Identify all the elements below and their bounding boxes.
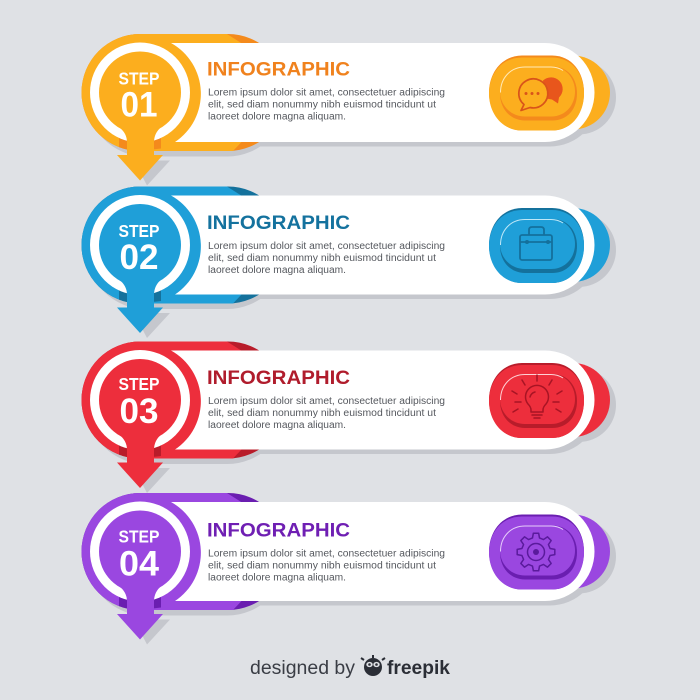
body text: elit, sed diam nonummy nibh euismod tincidunt ut xyxy=(208,253,436,264)
step badge: 01 xyxy=(120,86,158,124)
heading: INFOGRAPHIC xyxy=(207,58,350,80)
body text: elit, sed diam nonummy nibh euismod tincidunt ut xyxy=(208,100,436,110)
heading: INFOGRAPHIC xyxy=(207,367,350,389)
step badge: STEP xyxy=(118,221,160,241)
icon button: light bulb xyxy=(489,363,584,438)
icon: freepik logo xyxy=(361,655,385,676)
body text xyxy=(208,241,445,276)
heading: INFOGRAPHIC xyxy=(207,520,350,542)
panel: step 2 xyxy=(82,186,616,338)
panel: step 3 xyxy=(82,342,616,493)
body text: Lorem ipsum dolor sit amet, consectetuer adipiscing xyxy=(208,241,445,252)
panel: step 4 xyxy=(82,493,616,644)
step badge xyxy=(99,510,181,640)
body text xyxy=(208,548,445,584)
body text: elit, sed diam nonummy nibh euismod tincidunt ut xyxy=(208,408,436,419)
icon button: chat bubbles xyxy=(489,56,584,130)
body text: laoreet dolore magna aliquam. xyxy=(208,265,346,276)
icon button: briefcase xyxy=(489,208,584,283)
body text: elit, sed diam nonummy nibh euismod tincidunt ut xyxy=(208,560,436,572)
step badge: STEP xyxy=(118,526,160,546)
body text: Lorem ipsum dolor sit amet, consectetuer adipiscing xyxy=(208,88,445,98)
step badge: 02 xyxy=(120,238,158,277)
body text: laoreet dolore magna aliquam. xyxy=(208,572,346,584)
white card xyxy=(171,350,594,450)
footer credit xyxy=(250,655,450,679)
step badge: STEP xyxy=(118,374,160,394)
panel: step 1 xyxy=(82,34,616,186)
body text: Lorem ipsum dolor sit amet, consectetuer adipiscing xyxy=(208,548,445,560)
body text: Lorem ipsum dolor sit amet, consectetuer adipiscing xyxy=(208,396,445,407)
body text: laoreet dolore magna aliquam. xyxy=(208,112,346,122)
white card xyxy=(171,196,594,294)
body text xyxy=(208,396,445,431)
step badge: 04 xyxy=(119,544,160,584)
heading: INFOGRAPHIC xyxy=(207,212,350,234)
step badge xyxy=(99,359,181,488)
icon button: gear xyxy=(489,514,584,590)
step badge: STEP xyxy=(118,68,160,88)
white card xyxy=(171,43,594,142)
step badge xyxy=(99,52,181,180)
footer credit: freepik xyxy=(387,657,450,679)
step badge: 03 xyxy=(120,392,158,431)
body text xyxy=(208,88,445,122)
step badge xyxy=(99,204,181,333)
footer credit: designed by xyxy=(250,658,356,679)
body text: laoreet dolore magna aliquam. xyxy=(208,420,346,431)
white card xyxy=(171,502,594,601)
